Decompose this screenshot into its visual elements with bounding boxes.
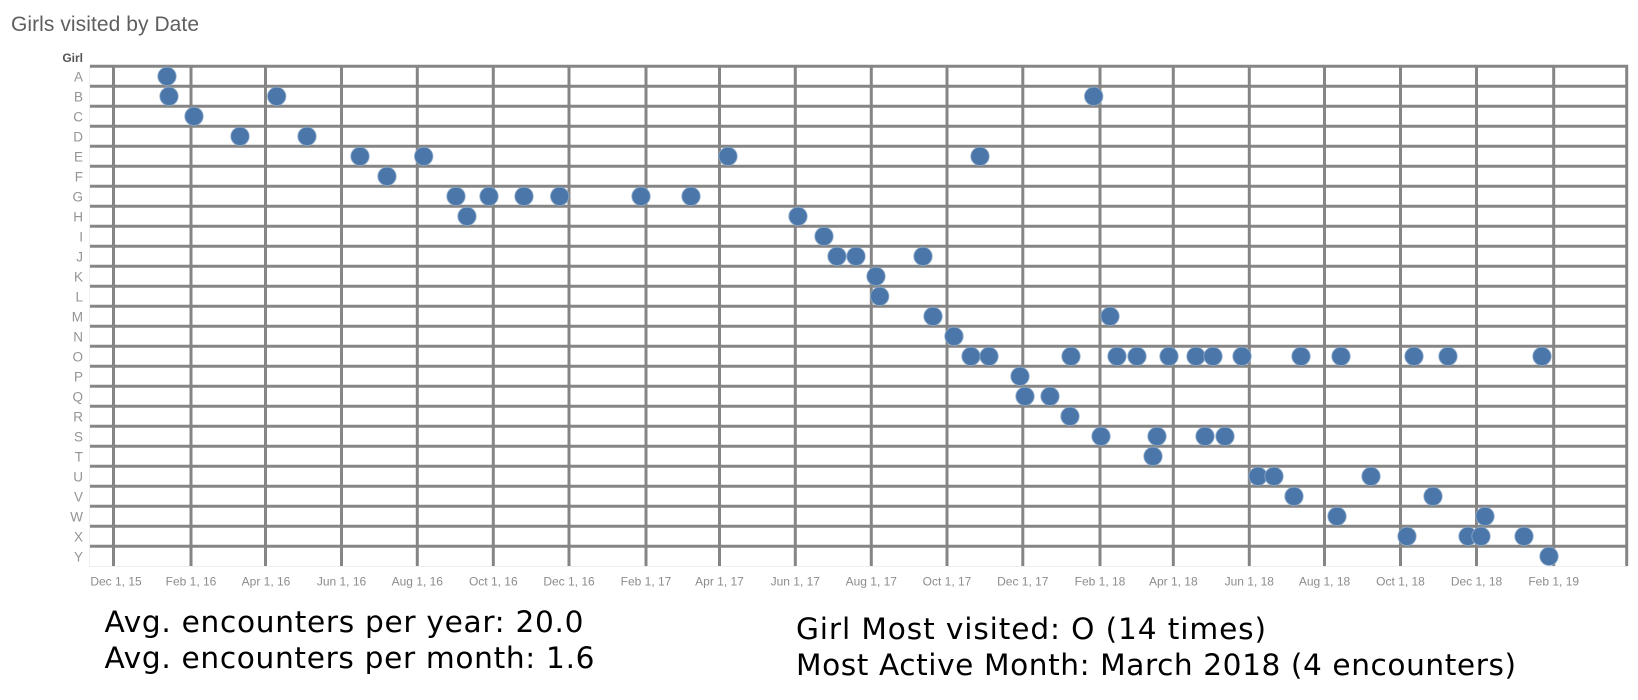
row F dots (378, 167, 396, 186)
y axis labels: X (74, 530, 83, 544)
y axis labels: P (74, 370, 83, 384)
x axis date labels: Apr 1, 17 (695, 574, 744, 588)
y axis labels: M (72, 310, 83, 324)
row T dots (1144, 447, 1162, 465)
y axis heading: Girl (62, 51, 83, 65)
x axis date labels: Jun 1, 18 (1225, 574, 1274, 588)
y axis labels: G (72, 190, 83, 204)
x axis date labels: Jun 1, 16 (317, 574, 367, 588)
row E dots (351, 147, 989, 166)
x axis date labels: Feb 1, 16 (166, 574, 217, 588)
row O dots (962, 347, 1551, 365)
x axis date labels: Oct 1, 17 (923, 574, 972, 588)
x axis date labels: Feb 1, 19 (1528, 574, 1579, 588)
y axis labels: V (74, 490, 83, 504)
x axis date labels (90, 574, 1579, 588)
stat: average encounters (104, 605, 594, 675)
row X dots (1398, 527, 1533, 546)
x axis date labels: Aug 1, 18 (1299, 574, 1351, 588)
x axis date labels: Dec 1, 17 (997, 574, 1049, 588)
title: Girls visited by Date (11, 13, 199, 36)
row I dots (815, 227, 833, 246)
scatter dots: visits per girl by date (158, 67, 1558, 566)
row H dots (458, 207, 807, 226)
row D dots (231, 127, 316, 146)
x axis date labels: Dec 1, 16 (543, 574, 595, 588)
row K dots (867, 267, 885, 285)
y axis labels: N (73, 330, 83, 344)
y axis labels: D (73, 130, 83, 144)
x axis date labels: Apr 1, 18 (1149, 574, 1198, 588)
y axis labels: F (75, 170, 83, 184)
row Y dots (1540, 547, 1558, 566)
row A dots (158, 67, 176, 86)
y axis labels: C (73, 110, 83, 124)
row B dots (160, 87, 1103, 106)
stat: average encounters: Avg. encounters per year: 20.0 (104, 605, 584, 639)
row C dots (185, 107, 203, 126)
y axis labels: H (73, 210, 83, 224)
y axis labels: T (75, 450, 83, 464)
row L dots (870, 287, 889, 305)
y axis labels (70, 70, 83, 564)
y axis labels: Y (74, 550, 83, 564)
x axis date labels: Aug 1, 17 (846, 574, 897, 588)
y axis labels: Q (72, 390, 83, 404)
y axis labels: U (73, 470, 83, 484)
y axis labels: R (73, 410, 83, 424)
x axis date labels: Jun 1, 17 (771, 574, 820, 588)
x axis date labels: Oct 1, 16 (469, 574, 518, 588)
x axis date labels: Aug 1, 16 (392, 574, 443, 588)
row S dots (1092, 427, 1234, 445)
x axis date labels: Dec 1, 15 (90, 574, 142, 588)
row P dots (1011, 367, 1029, 385)
row M dots (924, 307, 1119, 325)
row N dots (945, 327, 963, 345)
y axis labels: E (74, 150, 83, 164)
row W dots (1328, 507, 1494, 526)
y axis labels: B (74, 90, 83, 104)
x axis date labels: Feb 1, 18 (1075, 574, 1126, 588)
stat: most visited and most active: Girl Most visited: O (14 times) (796, 612, 1266, 646)
y axis labels: K (74, 270, 83, 284)
row Q dots (1016, 387, 1059, 405)
y axis labels: L (75, 290, 83, 304)
x axis date labels: Apr 1, 16 (242, 574, 291, 588)
y axis labels: O (72, 350, 83, 364)
row R dots (1061, 407, 1079, 425)
row J dots (828, 247, 932, 266)
stat: most visited and most active: Most Active Month: March 2018 (4 encounters) (796, 648, 1516, 682)
y axis labels: S (74, 430, 83, 444)
row G dots (447, 187, 700, 206)
y axis labels: W (70, 510, 83, 524)
row U dots (1249, 467, 1380, 485)
x axis date labels: Dec 1, 18 (1451, 574, 1503, 588)
x axis date labels: Oct 1, 18 (1376, 574, 1425, 588)
chart frame (90, 66, 1628, 566)
stat: average encounters: Avg. encounters per month: 1.6 (104, 641, 594, 675)
y axis labels: J (76, 250, 83, 264)
x axis date labels: Feb 1, 17 (621, 574, 672, 588)
y axis labels: I (79, 230, 83, 244)
row V dots (1285, 487, 1442, 505)
y axis labels: A (74, 70, 83, 84)
stat: most visited and most active (796, 612, 1516, 682)
